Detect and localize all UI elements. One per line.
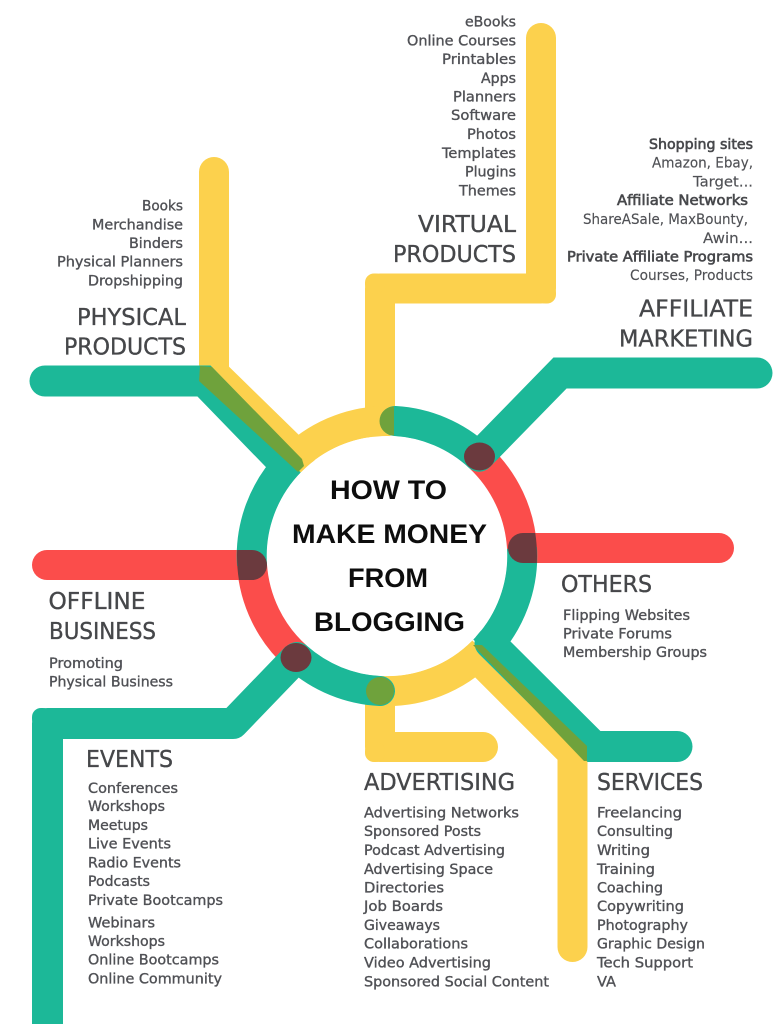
list: physical products items: Merchandise [92,218,183,234]
list: advertising items: Collaborations [364,936,468,952]
list: affiliate marketing items: Courses, Products [630,268,753,284]
ring arc: bottom yellow [380,651,483,691]
list: virtual products items: eBooks [465,14,516,30]
list: advertising items: Sponsored Posts [364,824,481,840]
list: virtual products items: Online Courses [407,34,516,50]
list: virtual products items [407,14,516,200]
list: physical products items [57,198,183,290]
panel: advertising [363,770,550,990]
corner: advertising lower left [365,742,385,762]
list: others items [563,608,707,661]
list: services items: Writing [597,843,650,859]
list: events items: Radio Events [88,856,181,872]
list: virtual products items: Apps [481,71,516,87]
list: physical products items: Physical Planners [57,254,183,270]
list: events items: Online Community [88,972,222,988]
heading: advertising: ADVERTISING [364,770,515,796]
overlap: right dark joint [508,533,537,563]
overlap: lower left dark joint [280,643,312,672]
overlap: top olive joint [380,406,394,436]
list: events items: Podcasts [88,874,150,890]
list: events items: Webinars [88,916,155,932]
list: offline business items: Promoting [49,656,123,672]
ring arc: lower left red [252,565,297,657]
ring arc: upper right red [479,457,522,548]
branch: services yellow line [480,661,572,947]
list: physical products items: Binders [129,236,183,252]
ring arc: top right teal [395,421,479,457]
title: BLOGGING [314,607,465,637]
overlap: left dark joint [237,550,267,580]
heading: offline business: BUSINESS [49,619,156,645]
panel: affiliate marketing [567,137,753,352]
list: events items: Workshops [88,799,165,815]
list: affiliate marketing items: Target... [692,174,753,190]
heading: offline business: OFFLINE [48,589,146,615]
branch: others red line [522,533,719,563]
list: advertising items: Directories [364,880,444,896]
heading: physical products: PHYSICAL [77,305,186,331]
list: affiliate marketing items: Private Affiliate Programs [567,250,753,266]
list: virtual products items: Themes [458,184,516,200]
overlap: services olive band [473,645,587,761]
list: services items: Coaching [597,880,663,896]
heading: physical products [64,305,186,360]
list: advertising items: Giveaways [364,918,440,934]
heading: services: SERVICES [597,770,703,796]
list: virtual products items: Templates [441,146,516,162]
heading: others: OTHERS [561,572,652,598]
title: MAKE MONEY [292,519,487,549]
branch: services teal line [490,643,677,746]
list: virtual products items: Plugins [465,164,516,180]
list: events items: Private Bootcamps [88,893,223,909]
list: services items: Freelancing [597,806,682,822]
ring inner white disc [267,436,507,676]
overlap: physical products olive band [199,366,304,472]
list: advertising items: Advertising Space [364,862,493,878]
panel: others [561,572,707,661]
list: offline business items [49,656,173,690]
list: services items: Graphic Design [597,936,705,952]
overlap: bottom olive joint [366,677,394,705]
list: virtual products items: Planners [453,90,516,106]
list: events items [88,781,223,988]
list: others items: Private Forums [563,626,672,642]
ring arc: right teal [484,548,522,650]
list: others items: Flipping Websites [563,608,690,624]
panel: virtual products [393,14,516,268]
list: events items: Live Events [88,836,171,852]
list: services items: Consulting [597,824,673,840]
list: offline business items: Physical Business [49,674,173,690]
list: affiliate marketing items: Amazon, Ebay, [652,156,753,172]
title: FROM [348,563,428,593]
heading: affiliate marketing: AFFILIATE [639,296,753,322]
list: virtual products items: Photos [467,127,516,143]
panel: services [596,770,705,990]
list: physical products items: Books [142,198,183,214]
list: physical products items: Dropshipping [88,274,183,290]
overlap: upper right dark joint [464,442,495,470]
heading: physical products: PRODUCTS [64,334,186,360]
panel: events [86,747,223,988]
list: services items: Training [596,862,655,878]
list: others items: Membership Groups [563,645,707,661]
branch: offline business red line [47,550,252,580]
list: advertising items: Sponsored Social Content [364,974,550,990]
heading: events: EVENTS [86,747,173,773]
panel: physical products [57,198,186,360]
list: affiliate marketing items: Affiliate Networks [617,193,748,209]
list: events items: Conferences [88,781,178,797]
heading: affiliate marketing: MARKETING [619,326,753,352]
list: advertising items: Podcast Advertising [364,843,505,859]
list: services items: Photography [597,918,688,934]
list: affiliate marketing items: Awin... [703,231,753,247]
heading: virtual products: VIRTUAL [418,212,516,238]
ring arc: left teal [252,462,290,565]
branch: affiliate marketing teal line [479,373,757,456]
panel: offline business [48,589,173,690]
corner: virtual products lower right [536,284,556,304]
branch: advertising yellow line [380,691,483,747]
branch: physical products yellow line [214,172,300,457]
list: advertising items: Video Advertising [364,956,491,972]
title: HOW TO [330,475,447,505]
heading: virtual products [393,212,516,268]
list: affiliate marketing items: Shopping sites [649,137,753,153]
list: advertising items: Advertising Networks [364,806,519,822]
list: events items: Workshops [88,934,165,950]
branch: virtual products yellow line [380,38,541,425]
heading: affiliate marketing [619,296,753,352]
corner: events upper left [32,708,52,728]
list: services items [596,806,705,990]
list: affiliate marketing items: ShareASale, MaxBounty, [583,212,748,228]
ring arc: top yellow [290,421,385,462]
list: events items: Online Bootcamps [88,952,219,968]
list: services items: VA [597,974,616,990]
list: services items: Copywriting [597,899,684,915]
corner: virtual products upper left [365,274,385,294]
ring arc: bottom teal [297,657,380,691]
heading: virtual products: PRODUCTS [393,242,516,268]
title [292,475,487,637]
list: advertising items: Job Boards [363,899,443,915]
branch: events teal line [48,657,297,1024]
list: services items: Tech Support [596,956,694,972]
list: advertising items [363,806,550,990]
list: affiliate marketing items [567,137,753,284]
list: virtual products items: Software [451,108,516,124]
heading: offline business [48,589,156,645]
list: virtual products items: Printables [442,52,516,68]
list: events items: Meetups [88,818,148,834]
branch: physical products teal line [45,381,285,464]
